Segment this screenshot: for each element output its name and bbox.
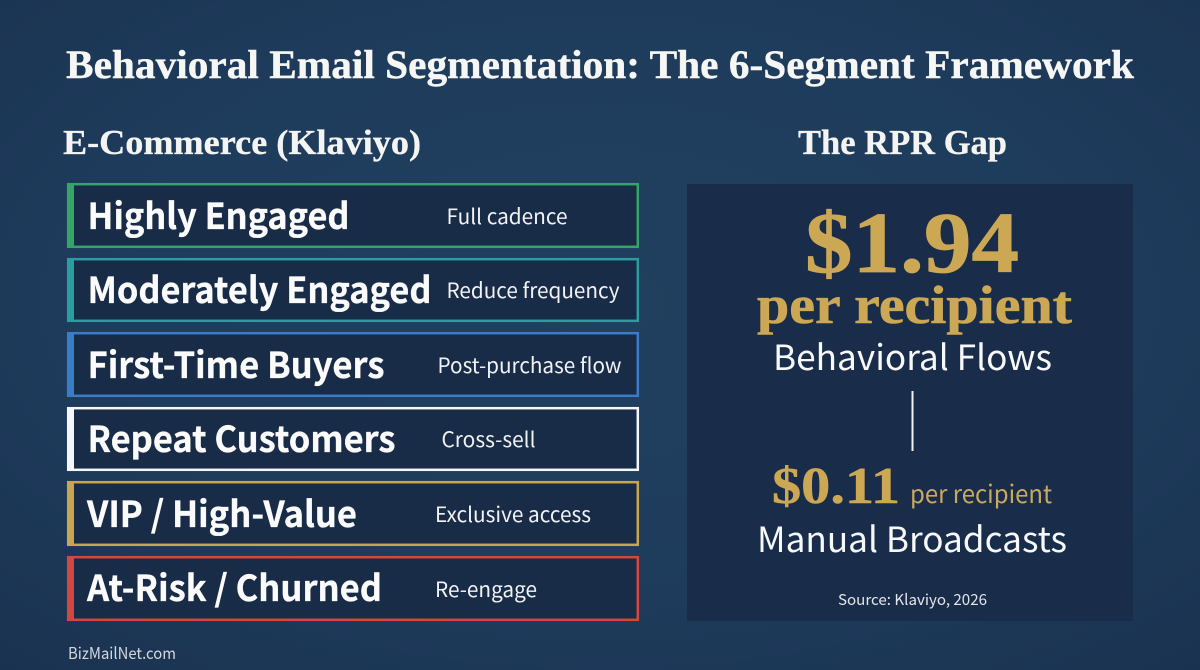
divider line bbox=[912, 391, 914, 451]
segment list bbox=[67, 183, 638, 621]
footer brand: BizMailNet.com bbox=[68, 640, 176, 664]
segment: highly engaged: Highly Engaged bbox=[88, 188, 350, 240]
label: manual broadcasts: Manual Broadcasts bbox=[757, 512, 1067, 563]
segment: moderately engaged: Reduce frequency bbox=[446, 275, 620, 305]
segment: highly engaged: Full cadence bbox=[446, 201, 568, 231]
per recipient small: per recipient bbox=[910, 475, 1053, 511]
segment: highly engaged bbox=[67, 183, 638, 248]
label: behavioral flows: Behavioral Flows bbox=[773, 330, 1052, 381]
per recipient gold: per recipient bbox=[757, 275, 1072, 335]
segment: moderately engaged: Moderately Engaged bbox=[88, 262, 432, 314]
title: Behavioral Email Segmentation: The 6-Segment Framework bbox=[66, 42, 1135, 87]
segment: repeat customers: Repeat Customers bbox=[88, 411, 396, 463]
heading: e-commerce: E-Commerce (Klaviyo) bbox=[63, 123, 421, 162]
segment: at-risk / churned: Re-engage bbox=[435, 574, 537, 604]
source: Source: Klaviyo, 2026 bbox=[838, 589, 987, 610]
segment: first-time buyers: First-Time Buyers bbox=[88, 337, 384, 389]
segment: at-risk / churned: At-Risk / Churned bbox=[86, 560, 382, 612]
segment: repeat customers: Cross-sell bbox=[442, 424, 536, 454]
segment: VIP / high-value: VIP / High-Value bbox=[86, 486, 357, 538]
segment: first-time buyers: Post-purchase flow bbox=[438, 350, 622, 380]
segment: moderately engaged bbox=[67, 258, 638, 322]
segment: repeat customers bbox=[67, 407, 638, 471]
segment: first-time buyers bbox=[67, 332, 638, 397]
segment: VIP / high-value: Exclusive access bbox=[435, 499, 591, 529]
big number: $1.94: $1.94 bbox=[805, 194, 1019, 291]
heading: RPR gap: The RPR Gap bbox=[798, 123, 1007, 162]
number: $0.11: $0.11 bbox=[772, 458, 900, 515]
segment: at-risk / churned bbox=[67, 556, 638, 621]
segment: VIP / high-value bbox=[67, 481, 638, 546]
panel: RPR gap bbox=[687, 184, 1133, 621]
